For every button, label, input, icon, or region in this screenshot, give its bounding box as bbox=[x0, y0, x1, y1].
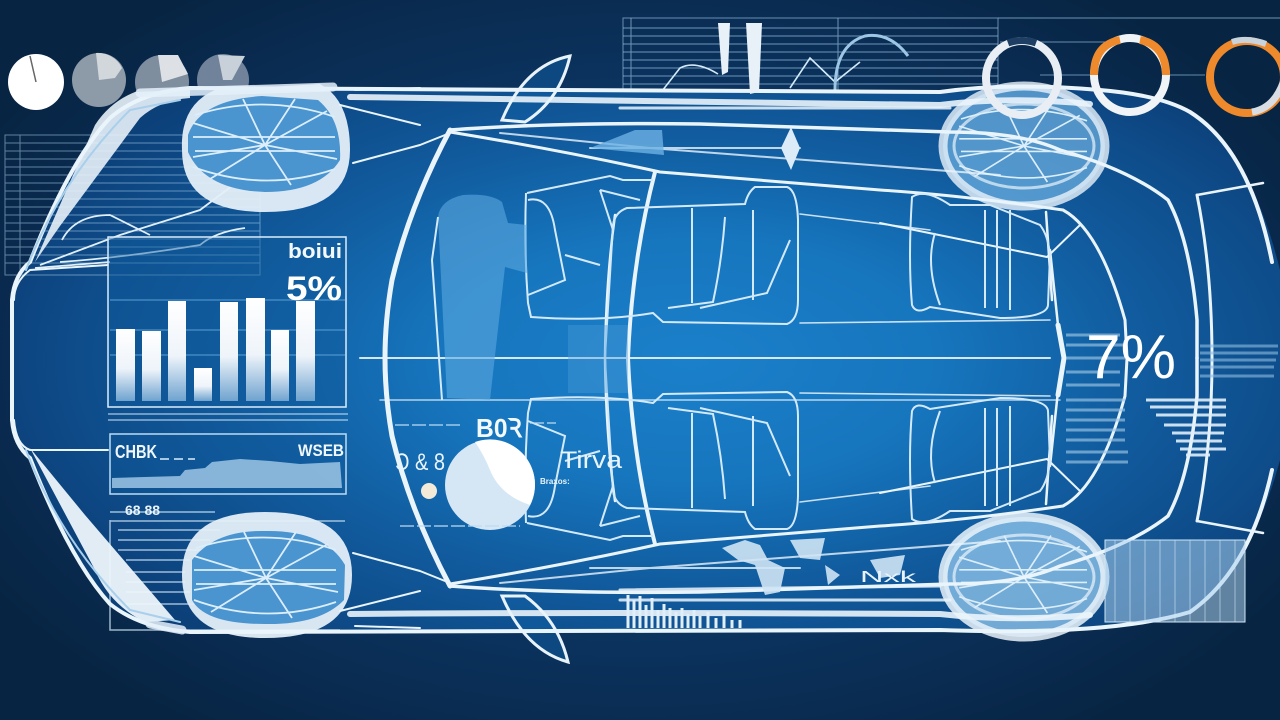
pie chart and labels: Ɔ & 8 bbox=[395, 449, 445, 476]
area chart panel bbox=[108, 414, 348, 518]
pie chart and labels: B0Ꝛ bbox=[476, 413, 523, 443]
top blueprint table chart bbox=[623, 18, 1280, 110]
world map and histogram: Nxk bbox=[860, 569, 918, 586]
windshield glass bottom bbox=[30, 448, 175, 622]
car outline bbox=[12, 86, 1272, 632]
bar chart panel: boiui bbox=[288, 241, 342, 263]
top pie charts bbox=[8, 53, 249, 110]
pie chart and labels: Tirva bbox=[560, 447, 623, 474]
side mirrors bbox=[502, 56, 570, 662]
top vertical bars bbox=[718, 23, 762, 94]
pie chart and labels bbox=[395, 413, 623, 530]
pie chart and labels: Braxos: bbox=[540, 477, 570, 486]
bar chart panel: 5% bbox=[286, 270, 342, 308]
left table chart bbox=[5, 135, 260, 275]
interior lines and seats bbox=[340, 88, 1263, 628]
wheel: rear right bbox=[943, 517, 1105, 637]
world map and histogram bbox=[628, 538, 918, 628]
area chart panel: 68 88 bbox=[125, 502, 160, 518]
windshield glass top bbox=[35, 90, 190, 262]
7 percent readout bbox=[1066, 323, 1278, 462]
funnel chart bbox=[1146, 400, 1226, 455]
steering wheel bbox=[438, 195, 527, 400]
wheel: front left bbox=[182, 84, 350, 212]
area chart panel: WSEB bbox=[298, 441, 344, 460]
wheel: rear left bbox=[182, 512, 352, 638]
bar chart panel bbox=[108, 237, 346, 407]
7 percent readout: 7% bbox=[1086, 323, 1176, 392]
wheel: front right bbox=[943, 86, 1105, 206]
area chart panel: CHBK bbox=[115, 442, 157, 462]
wheels bbox=[182, 84, 1105, 638]
rear view mirror bbox=[781, 127, 800, 170]
bottom right data panel bbox=[1105, 540, 1245, 622]
car body fill bbox=[12, 88, 1280, 632]
steering outline bbox=[432, 217, 442, 400]
ring gauges bbox=[986, 38, 1280, 115]
dashboard patch bbox=[590, 130, 664, 155]
center console bbox=[568, 325, 628, 393]
lower left table bbox=[110, 512, 345, 630]
